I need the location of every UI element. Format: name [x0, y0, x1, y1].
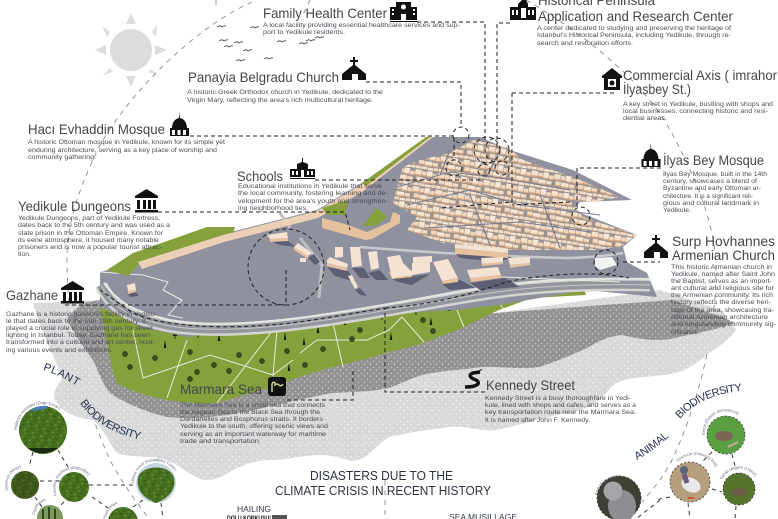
heading: plant biodiversity: BIODIVERSITY — [80, 399, 142, 439]
commercial axis: dential areas. — [623, 115, 667, 122]
gazhane: played a crucial role in supplying gas for street — [6, 325, 153, 332]
fortress walls — [322, 212, 400, 240]
disasters heading: CLIMATE CRISIS IN RECENT HISTORY — [275, 483, 491, 498]
panayia belgradu church — [187, 57, 384, 104]
animal photo: pigeon — [670, 452, 718, 502]
schools: the local community, fostering learning and de- — [238, 190, 388, 197]
surp hovhannes armenian church: Surp Hovhannes — [672, 233, 775, 249]
plant photo: ulmus — [131, 458, 177, 503]
surp hovhannes armenian church: history reflects the diverse heri- — [671, 299, 771, 306]
plant photo: fraxinus: Fraxinus excelsior (Dişbudak) — [52, 466, 90, 496]
kennedy street: Kennedy Street is a busy thoroughfare in Yedi- — [485, 395, 631, 402]
haci evhaddin mosque: A historic Ottoman mosque in Yedikule, known for its simple yet — [28, 139, 225, 146]
schools: Schools — [237, 168, 283, 184]
kennedy street: It is named after John F. Kennedy. — [485, 417, 590, 424]
surp hovhannes armenian church: nificance. — [671, 329, 700, 336]
north green strip — [107, 227, 235, 276]
plant photo: platanus: Platanus orientalis (Doğu Çınarı) — [14, 401, 60, 430]
kennedy street — [465, 369, 637, 424]
yedikule dungeons: dates back to the 5th century and was used as a — [18, 222, 171, 229]
sea wall — [138, 136, 433, 269]
buildings — [127, 212, 617, 297]
ilyas bey mosque: century, showcases a blend of — [663, 178, 757, 185]
heading: animal biodiversity: BIODIVERSITY — [675, 383, 741, 418]
sea: light band — [33, 290, 736, 480]
fortress courtyard — [322, 200, 388, 226]
animal photo: rabbit: Yaban tavşanı (Lepus) — [720, 466, 757, 479]
ilyas bey mosque — [642, 143, 768, 214]
marmara sea: The Marmara Sea is a small sea that connects — [180, 402, 325, 409]
plant photo: platanus — [14, 401, 67, 454]
gazhane: ing various events and exhibitions. — [6, 347, 113, 354]
plant photo: cypress — [32, 498, 63, 519]
disasters heading: DISASTERS DUE TO THE — [310, 468, 453, 483]
yedikule dungeons: Yedikule Dungeons — [18, 198, 131, 214]
animal photo: rabbit — [720, 466, 757, 506]
plant photo: ulmus: Ulmus minor (Karaağaç) Türleri — [131, 458, 177, 483]
surp hovhannes armenian church: Armenian Church — [672, 247, 775, 263]
family health center: Family Health Center — [263, 5, 387, 21]
schools — [237, 158, 388, 212]
historical peninsula center: search and restoration efforts. — [537, 40, 633, 47]
animal photo: cat: Kedi (Felis catus) — [594, 474, 620, 495]
gazhane: Gazhane is a historic gasworks facility in Yediku- — [6, 311, 157, 318]
gazhane — [6, 281, 157, 354]
plant photo: tree 2: Quercus (Meşe) — [4, 465, 21, 490]
schools: Educational institutions in Yedikule that serve — [238, 183, 383, 190]
plant photo: tree 6 — [103, 502, 138, 519]
yedikule dungeons: its eerie atmosphere, it housed many notable — [18, 237, 160, 244]
surp hovhannes armenian church: This historic Armenian church in — [671, 264, 773, 271]
haci evhaddin mosque: enduring architecture, serving as a key place of worship and — [28, 147, 218, 154]
animal photo: cat — [594, 474, 642, 519]
animal photo: sparrow — [702, 409, 746, 454]
animal network connectors — [636, 452, 736, 519]
park: green area — [100, 289, 586, 403]
icon: mosque — [170, 112, 189, 136]
icon: columns building — [135, 189, 158, 212]
hailing label: HAILING — [237, 504, 271, 514]
ground: coastal road — [101, 213, 650, 329]
icon: church — [342, 57, 366, 80]
haci evhaddin mosque: community gathering. — [28, 154, 96, 161]
leader lines — [65, 22, 661, 400]
ilyas bey mosque: gious and cultural landmark in — [663, 200, 760, 207]
building shadows — [128, 241, 520, 297]
church building — [595, 257, 617, 270]
icon: school — [290, 158, 315, 179]
commercial axis: local businesses, connecting historic and resi- — [623, 108, 768, 115]
panayia belgradu church: Panayia Belgradu Church — [188, 69, 339, 85]
commercial axis: A key street in Yedikule, bustling with shops and — [623, 101, 774, 108]
historical peninsula center: Istanbul's Historical Peninsula, including Yedikule, through re- — [537, 32, 731, 39]
icon: columns building — [61, 281, 84, 304]
ilyas bey mosque: Byzantine and early Ottoman ar- — [663, 185, 761, 192]
heading: plant biodiversity: PLANT — [44, 363, 81, 384]
icon: hospital — [390, 2, 417, 22]
schools: ing neighborhood ties. — [238, 205, 308, 212]
heading: animal biodiversity — [636, 383, 741, 460]
family health center: A local facility providing essential healthcare services and sup- — [263, 22, 460, 29]
surp hovhannes armenian church: ant cultural and religious site for — [671, 285, 774, 292]
icon: shop — [602, 68, 622, 90]
haci evhaddin mosque: Hacı Evhaddin Mosque — [28, 121, 165, 137]
marmara sea: serving as an important waterway for maritime — [180, 431, 327, 438]
surp hovhannes armenian church — [644, 233, 776, 336]
panayia belgradu church: A historic Greek Orthodox church in Yedikule, dedicated to the — [187, 89, 384, 96]
park paths — [133, 303, 505, 403]
family health center: port to Yedikule residents. — [263, 29, 345, 36]
icon: sea — [268, 377, 286, 396]
yedikule dungeons: state prison in the Ottoman Empire. Known for — [18, 230, 163, 237]
historical peninsula center: Application and Research Center — [538, 8, 733, 24]
ground: white zigzag walkway — [100, 272, 620, 318]
sun icon — [95, 13, 167, 87]
park trees — [122, 285, 579, 382]
icon: mosque — [642, 143, 660, 167]
gazhane: le that dates back to the late 19th century. It — [6, 318, 146, 325]
heading: plant biodiversity — [44, 363, 142, 439]
marmara sea: Yedikule to the south, offering scenic views and — [180, 423, 329, 430]
commercial axis — [602, 67, 777, 122]
sea: dark band — [67, 300, 735, 418]
marmara sea: trade and transportation. — [180, 438, 261, 445]
large dashed arc — [67, 2, 252, 516]
family health center — [263, 2, 460, 36]
yedikule dungeons — [18, 189, 171, 258]
kennedy street: kule, lined with shops and cafes, and serves as a — [485, 402, 637, 409]
ilyas bey mosque: Yedikule. — [663, 207, 691, 214]
ilyas bey mosque: chitecture. It is a significant reli- — [663, 193, 753, 200]
ground: peninsula — [100, 137, 657, 337]
gazhane: transformed into a cultural and art center, host- — [6, 339, 155, 346]
surp hovhannes armenian church: the Armenian community. Its rich — [671, 292, 774, 299]
surp hovhannes armenian church: Yedikule, named after Saint John — [671, 271, 776, 278]
commercial axis: İlyasbey St.) — [623, 80, 691, 97]
ilyas bey mosque: İlyas Bey Mosque, built in the 14th — [663, 169, 768, 178]
historical peninsula center — [510, 0, 733, 47]
disasters heading — [275, 468, 491, 498]
birds flock — [217, 26, 324, 61]
plant network connectors — [29, 450, 163, 519]
animal photo: sparrow: Serçe (Passer domesticus) — [702, 409, 739, 435]
kennedy street: key transportation route near the Marmara Sea. — [485, 409, 636, 416]
gazhane: lighting in Istanbul. Today, Gazhane has been — [6, 332, 151, 339]
marmara sea — [180, 377, 329, 445]
heading: animal biodiversity: ANIMAL — [636, 434, 669, 460]
marmara sea: Marmara Sea — [180, 381, 262, 397]
old town streets and shadows — [397, 150, 600, 248]
haci evhaddin mosque — [28, 112, 225, 161]
yedikule dungeons: prisoners and is now a popular tourist attrac- — [18, 244, 162, 251]
kennedy street: Kennedy Street — [486, 377, 575, 393]
surp hovhannes armenian church: and longstanding community sig- — [671, 321, 776, 328]
animal photo: pigeon: Güvercin (Columba livia) — [676, 452, 718, 467]
plant photo: cypress: Cupressus — [32, 498, 46, 515]
marmara sea: the Aegean Sea to the Black Sea through the — [180, 409, 321, 416]
icon: church — [644, 235, 668, 258]
hailing label — [227, 504, 287, 519]
icon: winding road — [465, 369, 482, 387]
surp hovhannes armenian church: tage of the area, showcasing tra- — [671, 307, 774, 314]
large dashed arc right — [526, 0, 716, 502]
old town — [393, 140, 637, 250]
vertical dashed axes — [216, 0, 385, 519]
historical peninsula center: A center dedicated to studying and preserving the heritage of — [537, 25, 731, 32]
icon: center building — [510, 0, 536, 20]
plant photo: tree 2 — [4, 465, 39, 499]
surp hovhannes armenian church: the Baptist, serves as an import- — [671, 278, 772, 285]
surp hovhannes armenian church: ditional Armenian architecture — [671, 314, 769, 321]
schools: velopment for the area's youth and strengthen- — [238, 198, 388, 205]
ilyas bey mosque: İlyas Bey Mosque — [663, 151, 764, 168]
gazhane: Gazhane — [6, 287, 58, 303]
marmara sea: Dardanelles and Bosphorus straits. It borders — [180, 416, 323, 423]
yedikule dungeons: Yedikule Dungeons, part of Yedikule Fortress, — [18, 215, 160, 222]
north strip green — [362, 137, 430, 186]
panayia belgradu church: Virgin Mary, reflecting the area's rich multicultural heritage. — [187, 97, 373, 104]
yedikule dungeons: tion. — [18, 251, 31, 258]
